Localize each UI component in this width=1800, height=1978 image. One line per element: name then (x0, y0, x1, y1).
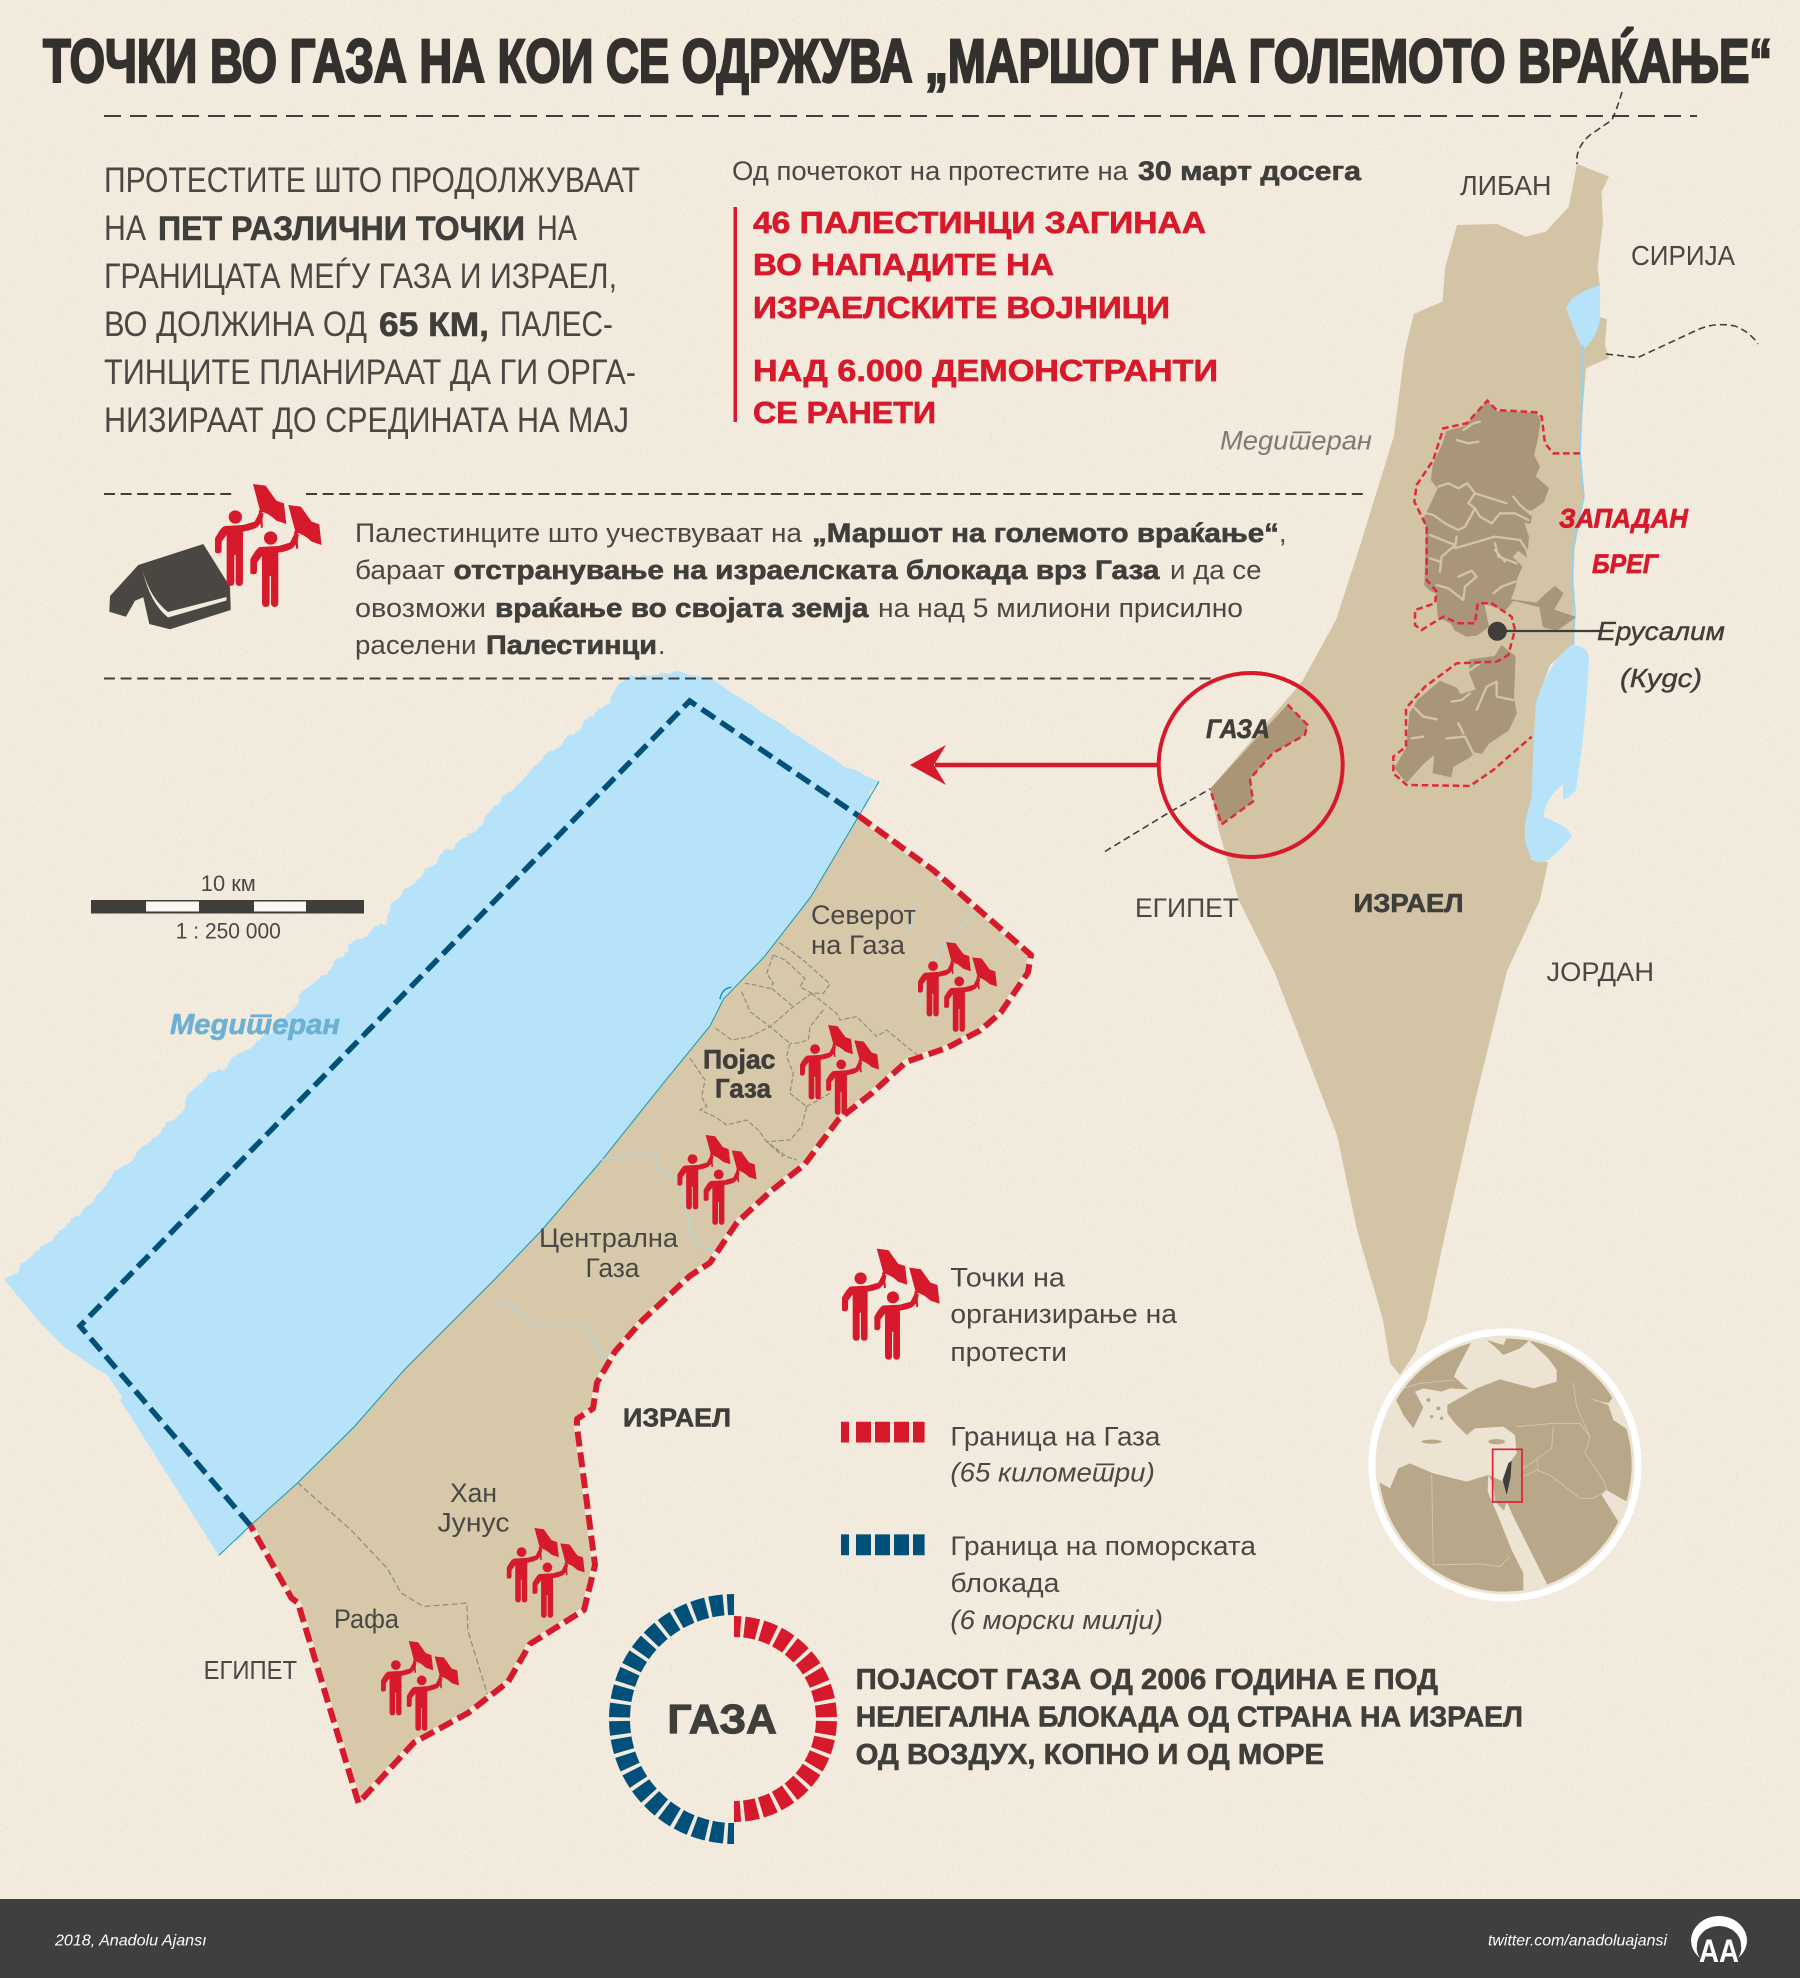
demands paragraph: на над 5 милиони присилно (878, 593, 1243, 623)
footer bar: twitter.com/anadoluajansi (1488, 1932, 1667, 1950)
icon: protest point Gaza city (800, 1025, 879, 1115)
Gaza land border (250, 816, 1031, 1803)
intro text block: ГРАНИЦАТА МЕЃУ ГАЗА И ИЗРАЕЛ, (104, 257, 617, 296)
legend: maritime blockade border (841, 1531, 1257, 1635)
icon: protesters with flags (215, 484, 322, 607)
demands paragraph: и да се (1170, 555, 1262, 585)
intro text block: ПАЛЕС- (500, 305, 613, 344)
legend: maritime blockade border: (6 морски милји) (950, 1605, 1163, 1635)
casualties intro line (732, 156, 1362, 186)
demands paragraph: , (1279, 518, 1287, 548)
Gaza map labels: ИЗРАЕЛ (623, 1403, 731, 1433)
scale bar: 10 км (201, 871, 256, 896)
Gaza map labels: Газа (715, 1074, 772, 1104)
casualties callout (734, 205, 1218, 430)
casualties intro line: Од почетокот на протестите на (732, 156, 1129, 186)
icon: protest point Khan Yunis (507, 1528, 585, 1618)
Gaza locator circle (1159, 673, 1343, 857)
legend: protest points: протести (950, 1337, 1067, 1367)
footer bar (0, 1899, 1800, 1978)
Gaza map labels: Хан (450, 1478, 497, 1508)
country labels: БРЕГ (1592, 549, 1659, 579)
demands paragraph: Палестинците што учествуваат на (355, 518, 803, 548)
demands paragraph: . (658, 630, 666, 660)
Sea of Galilee and Jordan river (1566, 285, 1600, 645)
country labels: Ерусалим (1597, 616, 1725, 646)
casualties intro line: 30 март досега (1138, 156, 1362, 186)
demands paragraph: Палестинци (486, 630, 657, 660)
governorate boundaries (690, 943, 920, 1160)
blockade statement: ОД ВОЗДУХ, КОПНО И ОД МОРЕ (856, 1739, 1324, 1771)
map: Gaza sea area (5, 672, 879, 1556)
casualties callout: ВО НАПАДИТЕ НА (753, 247, 1054, 282)
inset globe map (1368, 1328, 1642, 1602)
Gaza map labels: Газа (586, 1253, 640, 1283)
legend: maritime blockade border: Граница на поморската (950, 1531, 1257, 1561)
blockade statement (856, 1664, 1523, 1771)
country labels: Медитеран (1220, 426, 1372, 456)
country labels: (Кудс) (1620, 663, 1702, 693)
Gaza map labels: Јунус (438, 1508, 510, 1538)
country labels: СИРИЈА (1631, 240, 1735, 271)
country labels: ЛИБАН (1460, 170, 1552, 201)
Gaza map labels: Медитеран (170, 1009, 340, 1041)
map: Israel and Palestine (1210, 164, 1609, 1375)
demands paragraph: овозможи (355, 593, 486, 623)
Gaza map labels: Рафа (334, 1604, 400, 1634)
legend: Gaza border (841, 1422, 1161, 1488)
AA logo (1691, 1916, 1747, 1969)
Gaza map labels: ЕГИПЕТ (204, 1655, 297, 1685)
casualties callout: НАД 6.000 ДЕМОНСТРАНТИ (753, 353, 1218, 388)
country labels: ЗАПАДАН (1559, 504, 1688, 534)
demands paragraph: „Маршот на големото враќање“ (812, 518, 1279, 548)
demands paragraph (355, 518, 1287, 660)
legend: Gaza border: Граница на Газа (950, 1422, 1161, 1452)
intro text block: НА (104, 209, 147, 248)
border lines (1105, 92, 1758, 852)
Dead Sea (1525, 645, 1589, 862)
legend: protest points (842, 1249, 1178, 1367)
Jerusalem marker (1488, 622, 1600, 641)
legend: maritime blockade border: блокада (950, 1568, 1060, 1598)
blockade statement: НЕЛЕГАЛНА БЛОКАДА ОД СТРАНА НА ИЗРАЕЛ (856, 1702, 1523, 1734)
casualties callout: ИЗРАЕЛСКИТЕ ВОЈНИЦИ (753, 290, 1170, 325)
intro text block: ТИНЦИТЕ ПЛАНИРААТ ДА ГИ ОРГА- (104, 353, 636, 392)
Gaza map labels: Централна (539, 1223, 679, 1253)
legend: protest points: организирање на (950, 1299, 1178, 1329)
Gaza blockade ring: ГАЗА (668, 1696, 777, 1742)
streams (500, 879, 973, 1356)
map: Gaza Strip land (219, 781, 1031, 1803)
Gaza blockade ring (620, 1604, 826, 1834)
footer bar: 2018, Anadolu Ajansı (54, 1932, 207, 1950)
AA logo: AA (1699, 1933, 1739, 1969)
icon: protest point Rafah (381, 1641, 459, 1731)
country labels: ИЗРАЕЛ (1354, 888, 1464, 918)
legend (841, 1249, 1257, 1635)
West Bank territory (1393, 401, 1580, 786)
intro text block (104, 161, 640, 440)
Gaza map labels (170, 900, 916, 1685)
Gaza map labels: Појас (703, 1044, 776, 1074)
scale bar: 1 : 250 000 (176, 919, 281, 944)
Gaza locator circle: ГАЗА (1206, 714, 1270, 744)
country labels: ЕГИПЕТ (1135, 893, 1239, 923)
country labels: ЈОРДАН (1546, 957, 1654, 987)
intro text block: ВО ДОЛЖИНА ОД (104, 305, 367, 344)
intro text block: НА (537, 209, 578, 248)
casualties callout: 46 ПАЛЕСТИНЦИ ЗАГИНАА (753, 205, 1206, 240)
Gaza map labels: на Газа (811, 930, 906, 960)
demands paragraph: отстранување на израелската блокада врз Газа (454, 555, 1161, 585)
blockade statement: ПОЈАСОТ ГАЗА ОД 2006 ГОДИНА Е ПОД (856, 1664, 1438, 1696)
icon: tent (109, 544, 231, 629)
Gaza map labels: Северот (811, 900, 916, 930)
icon: protest point north Gaza (918, 942, 997, 1032)
demands paragraph: раселени (355, 630, 476, 660)
maritime blockade border (80, 701, 859, 1526)
legend: Gaza border: (65 километри) (950, 1458, 1155, 1488)
arrow to Gaza map (910, 745, 1158, 785)
scale bar (91, 871, 364, 944)
intro text block: 65 КМ, (379, 306, 489, 344)
intro text block: ПРОТЕСТИТЕ ШТО ПРОДОЛЖУВААТ (104, 161, 640, 200)
legend: protest points: Точки на (950, 1262, 1066, 1292)
casualties callout: СЕ РАНЕТИ (753, 395, 936, 430)
country labels (1135, 170, 1735, 987)
demands paragraph: враќање во својата земја (495, 593, 870, 623)
intro text block: ПЕТ РАЗЛИЧНИ ТОЧКИ (158, 210, 525, 248)
intro text block: НИЗИРААТ ДО СРЕДИНАТА НА МАЈ (104, 401, 629, 440)
demands paragraph: бараат (355, 555, 445, 585)
icon: protest point central Gaza (678, 1135, 756, 1225)
